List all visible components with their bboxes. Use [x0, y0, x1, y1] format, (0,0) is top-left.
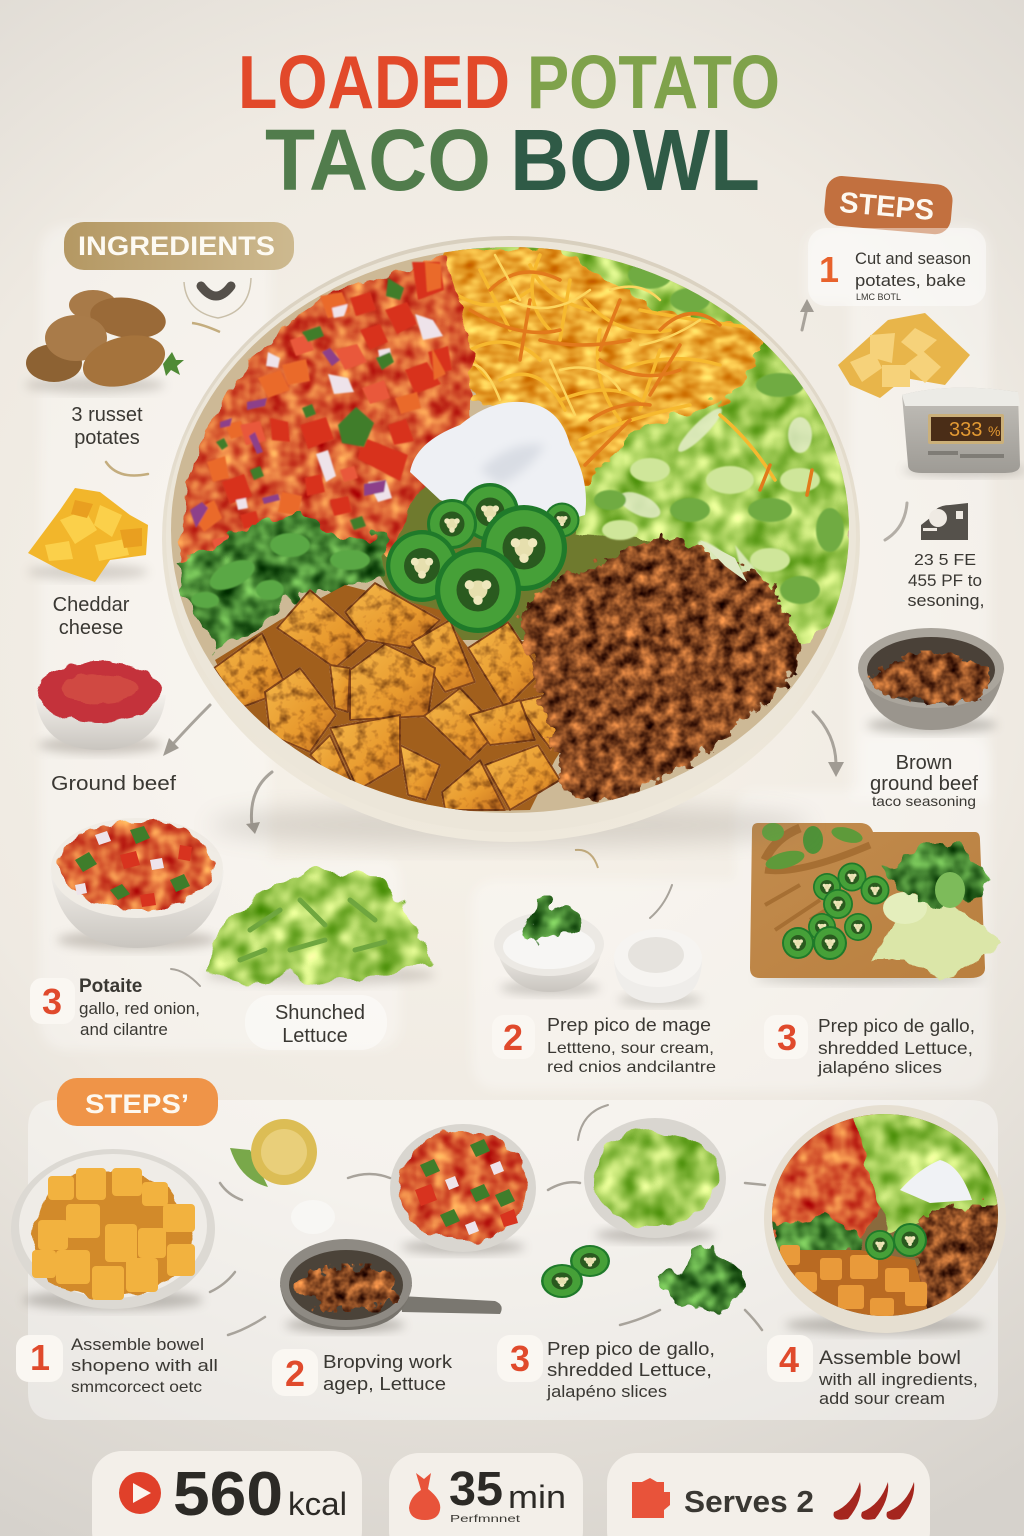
step badge: potaite gallo: gallo, red onion, — [79, 999, 200, 1018]
illustration: potato cubes — [838, 313, 970, 398]
illustration: oven: 333 — [949, 419, 982, 441]
steps label bottom — [57, 1078, 218, 1126]
step 3: prep pico: 3 — [510, 1338, 530, 1379]
stat: time — [389, 1453, 583, 1536]
step 2: prep: Lettteno, sour cream, — [547, 1040, 714, 1057]
finished bowl beef — [914, 1198, 998, 1309]
illustration: cream dollop — [291, 1200, 335, 1234]
cheese section — [432, 248, 812, 495]
text: oven temperature: sesoning, — [908, 591, 984, 610]
stat: time: min — [508, 1479, 566, 1515]
step 3: prep — [764, 1015, 975, 1077]
arrow: small right — [171, 969, 200, 986]
step 1: assemble bowel: shopeno with all — [71, 1356, 218, 1375]
arrow: curved left of icon — [885, 503, 907, 540]
step 2: prep: Prep pico de mage — [547, 1015, 711, 1035]
panel: prep step 2 and 3 — [472, 735, 990, 1090]
roasted potato cubes — [214, 583, 596, 810]
step 4: assemble bowl: 4 — [779, 1339, 799, 1380]
food base under toppings — [380, 486, 650, 640]
step 3: prep pico: shredded Lettuce, — [547, 1360, 712, 1380]
step 1: assemble bowel — [16, 1335, 218, 1396]
step 3: prep: jalapéno slices — [817, 1058, 942, 1077]
stat: calories: 560 — [173, 1460, 283, 1529]
title: POTATO — [527, 40, 780, 124]
illustration: oven: % — [988, 423, 1000, 439]
lettuce shard over beef — [700, 540, 747, 582]
finished bowl pico — [772, 1114, 881, 1238]
step 1: cut and season: 1 — [819, 249, 839, 290]
step 2: browning: 2 — [285, 1353, 305, 1394]
step 4: assemble bowl — [767, 1335, 978, 1408]
stat: servings: Serves 2 — [684, 1484, 814, 1519]
step 3: prep pico: Prep pico de gallo, — [547, 1339, 715, 1359]
text: ground beef: Ground beef — [51, 773, 176, 795]
step 2: browning: Bropving work — [323, 1352, 453, 1372]
label: shredded lettuce — [245, 995, 387, 1050]
step 3: prep pico — [497, 1335, 715, 1401]
arrow: bowl to lettuce — [246, 772, 272, 834]
ingredient: ground beef bowl — [35, 662, 166, 754]
text: brown ground beef — [870, 752, 978, 809]
step 4: assemble bowl: add sour cream — [819, 1389, 945, 1408]
finished bowl potatoes — [779, 1250, 928, 1316]
stat: calories: kcal — [288, 1486, 347, 1522]
panel: ingredients background — [40, 225, 400, 1050]
step badge: potaite gallo: 3 — [42, 981, 62, 1022]
illustration: beef in pan — [858, 628, 1004, 733]
panel: right steps column — [805, 225, 990, 800]
illustration: beef skillet — [280, 1239, 502, 1332]
step 3: prep: Prep pico de gallo, — [818, 1016, 975, 1036]
label: shredded lettuce: Lettuce — [282, 1025, 348, 1047]
illustration: finished bowl — [760, 1100, 1006, 1334]
title — [238, 40, 780, 209]
illustration: roasted potatoes plate — [11, 1149, 215, 1310]
step 3: prep pico: jalapéno slices — [546, 1382, 667, 1401]
text: oven temperature: 23 5 FE — [914, 552, 976, 569]
arrows: process flow — [210, 1105, 765, 1335]
text: brown ground beef: Brown — [896, 752, 952, 774]
label: shredded lettuce: Shunched — [275, 1002, 365, 1024]
ingredient: shredded lettuce — [205, 868, 435, 985]
step 1: assemble bowel: Assemble bowel — [71, 1335, 204, 1354]
illustration: white ramekin — [614, 929, 702, 1006]
lettuce section — [445, 246, 856, 645]
illustration: lemon and lime — [230, 1119, 317, 1187]
potatoes base — [215, 585, 560, 811]
text: russet potatoes: potates — [74, 427, 140, 449]
text: cheddar cheese: Cheddar — [53, 594, 130, 616]
main bowl — [162, 236, 860, 847]
icon: oven temperature — [921, 503, 968, 540]
step 4: assemble bowl: with all ingredients, — [818, 1370, 978, 1389]
panel: bottom steps — [28, 1100, 998, 1420]
text: oven temperature — [908, 552, 984, 610]
step 1: cut and season — [808, 228, 986, 306]
stat: time: 35 — [449, 1463, 503, 1516]
text: cheddar cheese — [53, 594, 130, 639]
text: oven temperature: 455 PF to — [908, 572, 982, 590]
stat: servings — [607, 1453, 930, 1536]
step 2: prep: 2 — [503, 1017, 523, 1058]
step 4: assemble bowl: Assemble bowl — [819, 1348, 961, 1369]
illustration: lettuce bowl — [584, 1118, 726, 1242]
step 3: prep: 3 — [777, 1017, 797, 1058]
finished bowl cilantro — [772, 1212, 864, 1260]
lettuce leaves — [452, 248, 844, 610]
steps tag top right — [823, 175, 954, 236]
step 2: browning: agep, Lettuce — [323, 1374, 446, 1394]
illustration: oven — [902, 388, 1024, 476]
step 1: assemble bowel: 1 — [30, 1337, 50, 1378]
icon: smile arcs — [184, 278, 251, 332]
steps tag top right: STEPS — [838, 187, 935, 227]
text: brown ground beef: ground beef — [870, 773, 978, 795]
ingredient: potatoes — [25, 290, 184, 395]
ground beef section — [520, 538, 800, 802]
step 1: cut and season: potates, bake — [855, 271, 966, 290]
arrow: to ground beef — [163, 705, 210, 756]
arrow: up to step 1 — [800, 299, 814, 330]
chili peppers — [834, 1482, 914, 1520]
text: russet potatoes: 3 russet — [71, 404, 143, 426]
step 2: prep — [492, 1015, 716, 1076]
jalapeno slices — [386, 483, 580, 633]
arrow: to brown ground beef — [813, 712, 844, 777]
step 1: assemble bowel: smmcorcect oetc — [71, 1379, 202, 1396]
step badge: potaite gallo: and cilantre — [80, 1020, 168, 1039]
illustration: pico bowl small — [390, 1124, 536, 1254]
ingredients label — [64, 222, 294, 270]
arrows: to cream — [575, 850, 672, 918]
step badge: potaite gallo — [30, 976, 200, 1039]
text: cheddar cheese: cheese — [59, 617, 123, 639]
sour cream — [410, 402, 586, 528]
step 1: cut and season: LMC BOTL — [856, 292, 901, 302]
illustration: cilantro sprig — [657, 1245, 743, 1320]
step badge: potaite gallo: Potaite — [79, 976, 142, 997]
stat: calories — [92, 1451, 362, 1536]
text: brown ground beef: taco seasoning — [872, 793, 976, 809]
illustration: sour cream bowl — [494, 900, 604, 995]
cilantro section — [175, 512, 388, 652]
ingredients label: INGREDIENTS — [78, 231, 275, 261]
step 3: prep: shredded Lettuce, — [818, 1038, 973, 1058]
ingredient: pico bowl — [50, 818, 224, 950]
title: BOWL — [510, 112, 760, 209]
illustration: cutting board — [750, 823, 1002, 984]
pico de gallo section — [180, 258, 472, 580]
steps label bottom: STEPS’ — [85, 1089, 189, 1119]
step 2: browning — [272, 1349, 453, 1396]
finished bowl lettuce — [853, 1114, 998, 1234]
ingredient: cheddar cubes — [28, 488, 148, 582]
title: LOADED — [238, 40, 510, 124]
illustration: jalapeno slices — [541, 1245, 610, 1298]
stat: time: Perfmnnet — [450, 1514, 520, 1525]
step 2: prep: red cnios andcilantre — [547, 1059, 716, 1076]
arrow: squiggle — [106, 462, 148, 476]
text: russet potatoes — [71, 404, 143, 449]
title: TACO — [265, 112, 491, 209]
step 1: cut and season: Cut and season — [855, 249, 971, 268]
